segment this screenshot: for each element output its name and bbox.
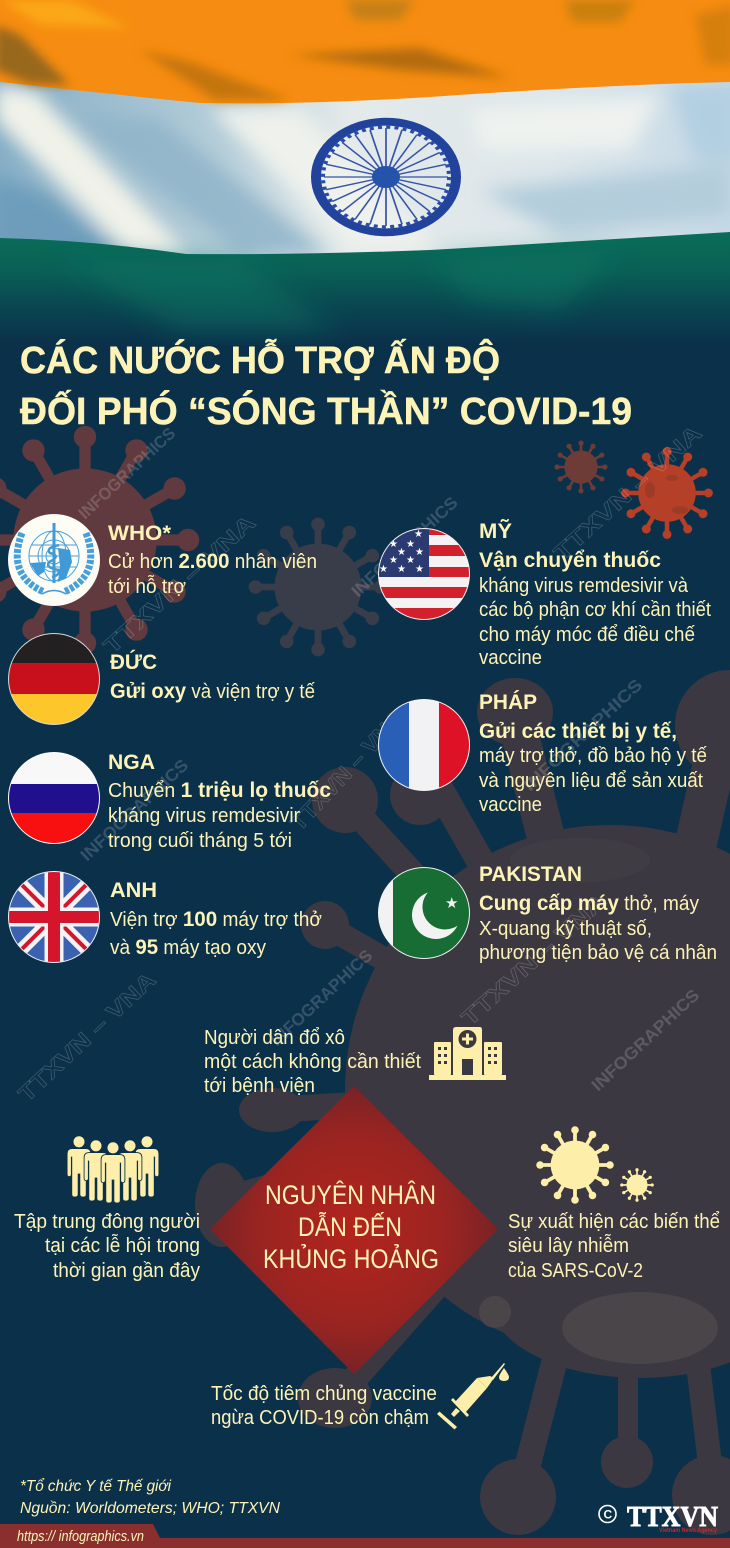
background: virus highlights	[479, 838, 718, 1364]
text: crowded festivals: tại các lễ hội trong	[45, 1234, 200, 1257]
cause: crowded festivals	[14, 1136, 200, 1282]
diamond: causes of crisis: DẪN ĐẾN	[298, 1211, 402, 1242]
watermarks: TTXVN – VNA	[285, 705, 409, 835]
text: Pháp details: máy trợ thở, đồ bảo hộ y tế	[479, 745, 707, 767]
logo: TTXVN: C	[604, 1508, 612, 1522]
text: hospital rush: Người dân đổ xô	[204, 1027, 345, 1049]
logo: TTXVN: Vietnam News Agency	[659, 1527, 717, 1534]
diamond: causes of crisis: KHỦNG HOẢNG	[263, 1242, 439, 1274]
title: CÁC NƯỚC HỖ TRỢ ẤN ĐỘ	[20, 337, 500, 382]
panel: WHO	[8, 514, 317, 606]
title	[20, 337, 632, 433]
text: Mỹ details: vaccine	[479, 647, 542, 669]
text: Mỹ details: kháng virus remdesivir và	[479, 575, 689, 597]
text: hospital rush	[204, 1027, 421, 1097]
text: Mỹ details: cho máy móc để điều chế	[479, 624, 695, 646]
text: virus variants	[508, 1211, 720, 1282]
text: Mỹ details: các bộ phận cơ khí cần thiết	[479, 599, 711, 621]
watermarks: INFOGRAPHICS	[588, 986, 703, 1095]
text: Pháp details: vaccine	[479, 794, 542, 816]
text: slow vaccination: Tốc độ tiêm chủng vaccine	[211, 1383, 437, 1405]
text: WHO details	[108, 549, 317, 598]
text: Pakistan details	[479, 891, 717, 964]
text: Anh details	[110, 907, 322, 959]
cause: slow vaccination	[211, 1363, 509, 1430]
background: large gray virus	[195, 670, 730, 1535]
icon: US flag	[378, 528, 470, 621]
footer strip: https:// infographics.vn	[17, 1528, 144, 1545]
icon: Ashoka Chakra	[316, 122, 456, 232]
watermarks: TTXVN – VNA	[99, 510, 260, 659]
icon: Pakistani flag: ★	[445, 895, 458, 912]
panel: Mỹ	[378, 518, 711, 669]
text: crowded festivals	[14, 1211, 200, 1282]
text: Pháp details: và nguyên liệu để sản xuất	[479, 770, 703, 792]
text: Pháp details: Gửi các thiết bị y tế,	[479, 719, 677, 743]
icon: WHO emblem	[8, 514, 100, 606]
icon: crowd of people	[67, 1136, 159, 1203]
text: hospital rush: tới bệnh viện	[204, 1075, 315, 1097]
banner: Indian flag	[0, 0, 730, 345]
text: Mỹ details: Vận chuyển thuốc	[479, 548, 661, 572]
label: Pháp: PHÁP	[479, 689, 537, 714]
watermarks: INFOGRAPHICS	[77, 756, 192, 865]
text: Pakistan details: Cung cấp máy thở, máy	[479, 891, 699, 915]
panel: Đức	[8, 633, 315, 725]
label: Nga: NGA	[108, 750, 155, 774]
icon: hospital	[429, 1027, 506, 1080]
text: WHO details: Cử hơn 2.600 nhân viên	[108, 549, 317, 573]
footer strip	[0, 1524, 730, 1548]
text: crowded festivals: thời gian gần đây	[53, 1260, 200, 1282]
text: Nga details	[108, 778, 331, 852]
cause: virus variants	[508, 1126, 720, 1282]
watermarks: INFOGRAPHICS	[348, 493, 462, 601]
text: slow vaccination	[211, 1383, 437, 1429]
panel: Anh	[8, 871, 322, 963]
text: Mỹ details	[479, 548, 711, 669]
background: bright red virus	[621, 447, 713, 539]
watermarks: INFOGRAPHICS	[520, 675, 646, 795]
diamond: causes of crisis	[210, 1086, 498, 1374]
icon: Russian flag	[8, 752, 100, 844]
icon: US flag: ★★★★★★★★★★	[379, 529, 424, 575]
logo: TTXVN: TTXVN	[627, 1501, 718, 1533]
text: Anh details: và 95 máy tạo oxy	[110, 935, 266, 959]
text: Pháp details	[479, 719, 707, 816]
text: virus variants: siêu lây nhiễm	[508, 1234, 629, 1257]
label: Anh: ANH	[110, 878, 157, 902]
background: top-left red virus	[0, 426, 199, 654]
icon: syringe	[437, 1363, 509, 1430]
watermarks: TTXVN – VNA	[457, 888, 611, 1031]
text: Pakistan details: X-quang kỹ thuật số,	[479, 918, 652, 940]
text: Đức details: Gửi oxy và viện trợ y tế	[110, 679, 315, 703]
label: Mỹ: MỸ	[479, 518, 512, 543]
text: slow vaccination: ngừa COVID-19 còn chậm	[211, 1407, 429, 1429]
text: crowded festivals: Tập trung đông người	[14, 1211, 200, 1233]
logo: TTXVN	[599, 1501, 718, 1534]
background: middle gray virus	[249, 518, 387, 656]
watermarks: INFOGRAPHICS	[75, 424, 179, 523]
footnote and source	[20, 1477, 280, 1517]
label: Pakistan: PAKISTAN	[479, 862, 582, 886]
label: Đức: ĐỨC	[110, 649, 157, 674]
text: WHO details: tới hỗ trợ	[108, 575, 186, 598]
diamond: causes of crisis: NGUYÊN NHÂN	[265, 1179, 436, 1210]
icon: coronavirus	[536, 1126, 654, 1204]
text: Anh details: Viện trợ 100 máy trợ thở	[110, 907, 322, 931]
panel: Pháp	[378, 689, 707, 816]
icon: French flag	[378, 699, 470, 791]
footnote and source: *Tổ chức Y tế Thế giới	[20, 1477, 171, 1495]
title: ĐỐI PHÓ “SÓNG THẦN” COVID-19	[20, 388, 632, 433]
watermarks: INFOGRAPHICS	[267, 946, 376, 1050]
text: Nga details: Chuyển 1 triệu lọ thuốc	[108, 778, 331, 802]
panel: Pakistan	[378, 862, 717, 964]
watermarks: TTXVN – VNA	[549, 420, 707, 566]
icon: German flag	[8, 633, 100, 725]
watermarks: TTXVN – VNA	[13, 967, 161, 1107]
text: virus variants: của SARS-CoV-2	[508, 1260, 643, 1282]
text: hospital rush: một cách không cần thiết	[204, 1051, 421, 1073]
cause: hospital overcrowding	[204, 1027, 506, 1097]
text: Nga details: kháng virus remdesivir	[108, 805, 300, 827]
text: Nga details: trong cuối tháng 5 tới	[108, 830, 292, 852]
text: virus variants: Sự xuất hiện các biến thể	[508, 1211, 720, 1233]
text: Pakistan details: phương tiện bảo vệ cá nhân	[479, 942, 717, 964]
icon: UK flag	[8, 871, 100, 963]
label: WHO: WHO*	[108, 521, 172, 545]
icon: Pakistani flag	[378, 867, 473, 960]
footnote and source: Nguồn: Worldometers; WHO; TTXVN	[20, 1500, 280, 1517]
panel: Nga	[8, 750, 331, 852]
watermarks	[13, 420, 707, 1107]
background: dim red virus	[554, 440, 608, 494]
